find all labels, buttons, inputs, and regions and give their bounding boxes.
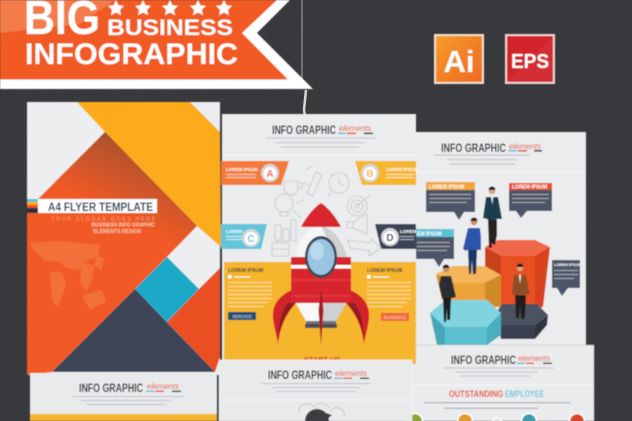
callout: C bbox=[221, 224, 267, 249]
panel: yellow rocket section bbox=[224, 262, 416, 364]
heading: bottom center page title bbox=[261, 369, 371, 392]
icon: EPS badge bbox=[505, 34, 555, 84]
panel: bottom left page bbox=[30, 373, 217, 421]
heading: rocket page title bbox=[266, 124, 376, 148]
chart: hexagon steps bbox=[430, 240, 550, 345]
heading: staircase page title: INFO GRAPHIC bbox=[441, 143, 506, 155]
step: teal hexagon bbox=[430, 300, 501, 345]
icon: dark rocket doodles bbox=[299, 404, 344, 421]
text block: slogan: BUSINESS INFO GRAPHIC bbox=[92, 222, 155, 228]
person: blue suit bbox=[463, 218, 481, 274]
text block: slogan: ELEMENTS DESIGN bbox=[93, 229, 141, 235]
panel: staircase page bbox=[416, 132, 586, 347]
banner heading: INFOGRAPHIC: INFOGRAPHIC bbox=[25, 38, 238, 71]
icon: Ai badge: Ai bbox=[444, 44, 474, 79]
text block: employee intro bbox=[424, 402, 570, 409]
text block: service: SERVICE bbox=[232, 314, 252, 319]
panel: rocket page bbox=[221, 114, 418, 364]
text block: business bbox=[367, 268, 411, 321]
heading: staircase page title: elements bbox=[509, 142, 541, 151]
text block: service bbox=[228, 268, 272, 320]
heading: employee page title: elements bbox=[518, 354, 550, 363]
person: top navy jacket bbox=[483, 187, 502, 248]
heading: employee page title: INFO GRAPHIC bbox=[451, 355, 516, 367]
callout: D: LOREM bbox=[400, 229, 417, 234]
callout: D bbox=[375, 224, 417, 249]
callout: red bbox=[509, 183, 552, 218]
callout: C: C bbox=[247, 234, 255, 245]
heading: rocket page title: elements bbox=[339, 124, 371, 133]
heading: outstanding employee: EMPLOYEE bbox=[505, 389, 544, 399]
cover shape: white strip bbox=[167, 226, 220, 289]
heading: outstanding employee: OUTSTANDING bbox=[449, 389, 503, 399]
banner: Big Business Infographic bbox=[0, 0, 313, 89]
heading: start up: START UP bbox=[304, 355, 340, 364]
callout: teal: EM IPSUM bbox=[417, 232, 442, 238]
cover shape: teal square bbox=[135, 257, 199, 322]
heading: staircase page title bbox=[434, 142, 542, 165]
callout: A: A bbox=[266, 169, 274, 180]
heading: employee page title bbox=[444, 354, 554, 377]
callout: red: LOREM IPSUM bbox=[512, 184, 547, 190]
panel: bottom center page bbox=[219, 360, 412, 421]
step: dark hexagon bbox=[498, 304, 548, 339]
callout: A bbox=[221, 161, 289, 185]
callout: B: LOREM IPSUM bbox=[386, 167, 418, 172]
band: yellow footer bbox=[30, 414, 217, 421]
callout: dark: LOREM IPSUM bbox=[554, 263, 581, 267]
cover shape: brown shaded corner bbox=[56, 132, 197, 250]
callout: orange bbox=[426, 182, 475, 220]
callout: dark bbox=[552, 260, 581, 296]
callout: C: LOREM bbox=[226, 229, 243, 234]
cover shape: dark triangle bbox=[52, 289, 215, 372]
heading: bottom left page title bbox=[72, 382, 184, 405]
banner heading: BUSINESS: BUSINESS bbox=[107, 15, 233, 40]
text block: service: LOREM IPSUM bbox=[228, 268, 263, 274]
callout: B: B bbox=[366, 169, 374, 180]
callout: A: LOREM IPSUM bbox=[226, 167, 258, 172]
cover shape: right orange bbox=[167, 268, 220, 372]
heading: rocket page title: INFO GRAPHIC bbox=[272, 125, 336, 137]
heading: bottom center page title: INFO GRAPHIC bbox=[268, 370, 332, 382]
cover shape: big orange bbox=[27, 132, 197, 375]
callout: D: D bbox=[386, 233, 394, 244]
heading: bottom center page title: elements bbox=[335, 369, 367, 378]
label: A4 flyer template: A4 FLYER TEMPLATE bbox=[48, 200, 153, 214]
icon: employee badges bbox=[408, 414, 584, 421]
icon: five stars bbox=[108, 0, 232, 15]
chart: world map bbox=[30, 241, 106, 310]
text block: business: LOREM IPSUM bbox=[367, 268, 402, 274]
panel: outstanding employee page bbox=[403, 345, 594, 421]
heading: bottom left page title: elements bbox=[147, 382, 179, 391]
step: yellow hexagon bbox=[436, 266, 501, 307]
panel: A4 flyer cover bbox=[27, 102, 221, 375]
person: brown jacket bbox=[512, 264, 530, 320]
heading: outstanding employee bbox=[449, 389, 544, 399]
text block: slogan: YOUR SLOGAN GOES HERE bbox=[51, 216, 156, 222]
heading: bottom left page title: INFO GRAPHIC bbox=[79, 383, 143, 395]
step: red hexagon bbox=[485, 240, 550, 309]
icon: Ai badge bbox=[434, 34, 484, 84]
cover shape: yellow band bbox=[77, 102, 221, 247]
callout: orange: LOREM IPSUM bbox=[429, 184, 464, 190]
icon: rocket bbox=[273, 203, 369, 345]
icon: line art business doodles bbox=[272, 166, 381, 256]
callout: B bbox=[355, 161, 418, 185]
callout: teal bbox=[416, 229, 454, 267]
text block: slogan bbox=[51, 216, 156, 235]
icon: EPS badge: EPS bbox=[511, 51, 549, 73]
text block: business: BUSINESS bbox=[384, 315, 406, 320]
person: black suit bbox=[439, 265, 456, 322]
